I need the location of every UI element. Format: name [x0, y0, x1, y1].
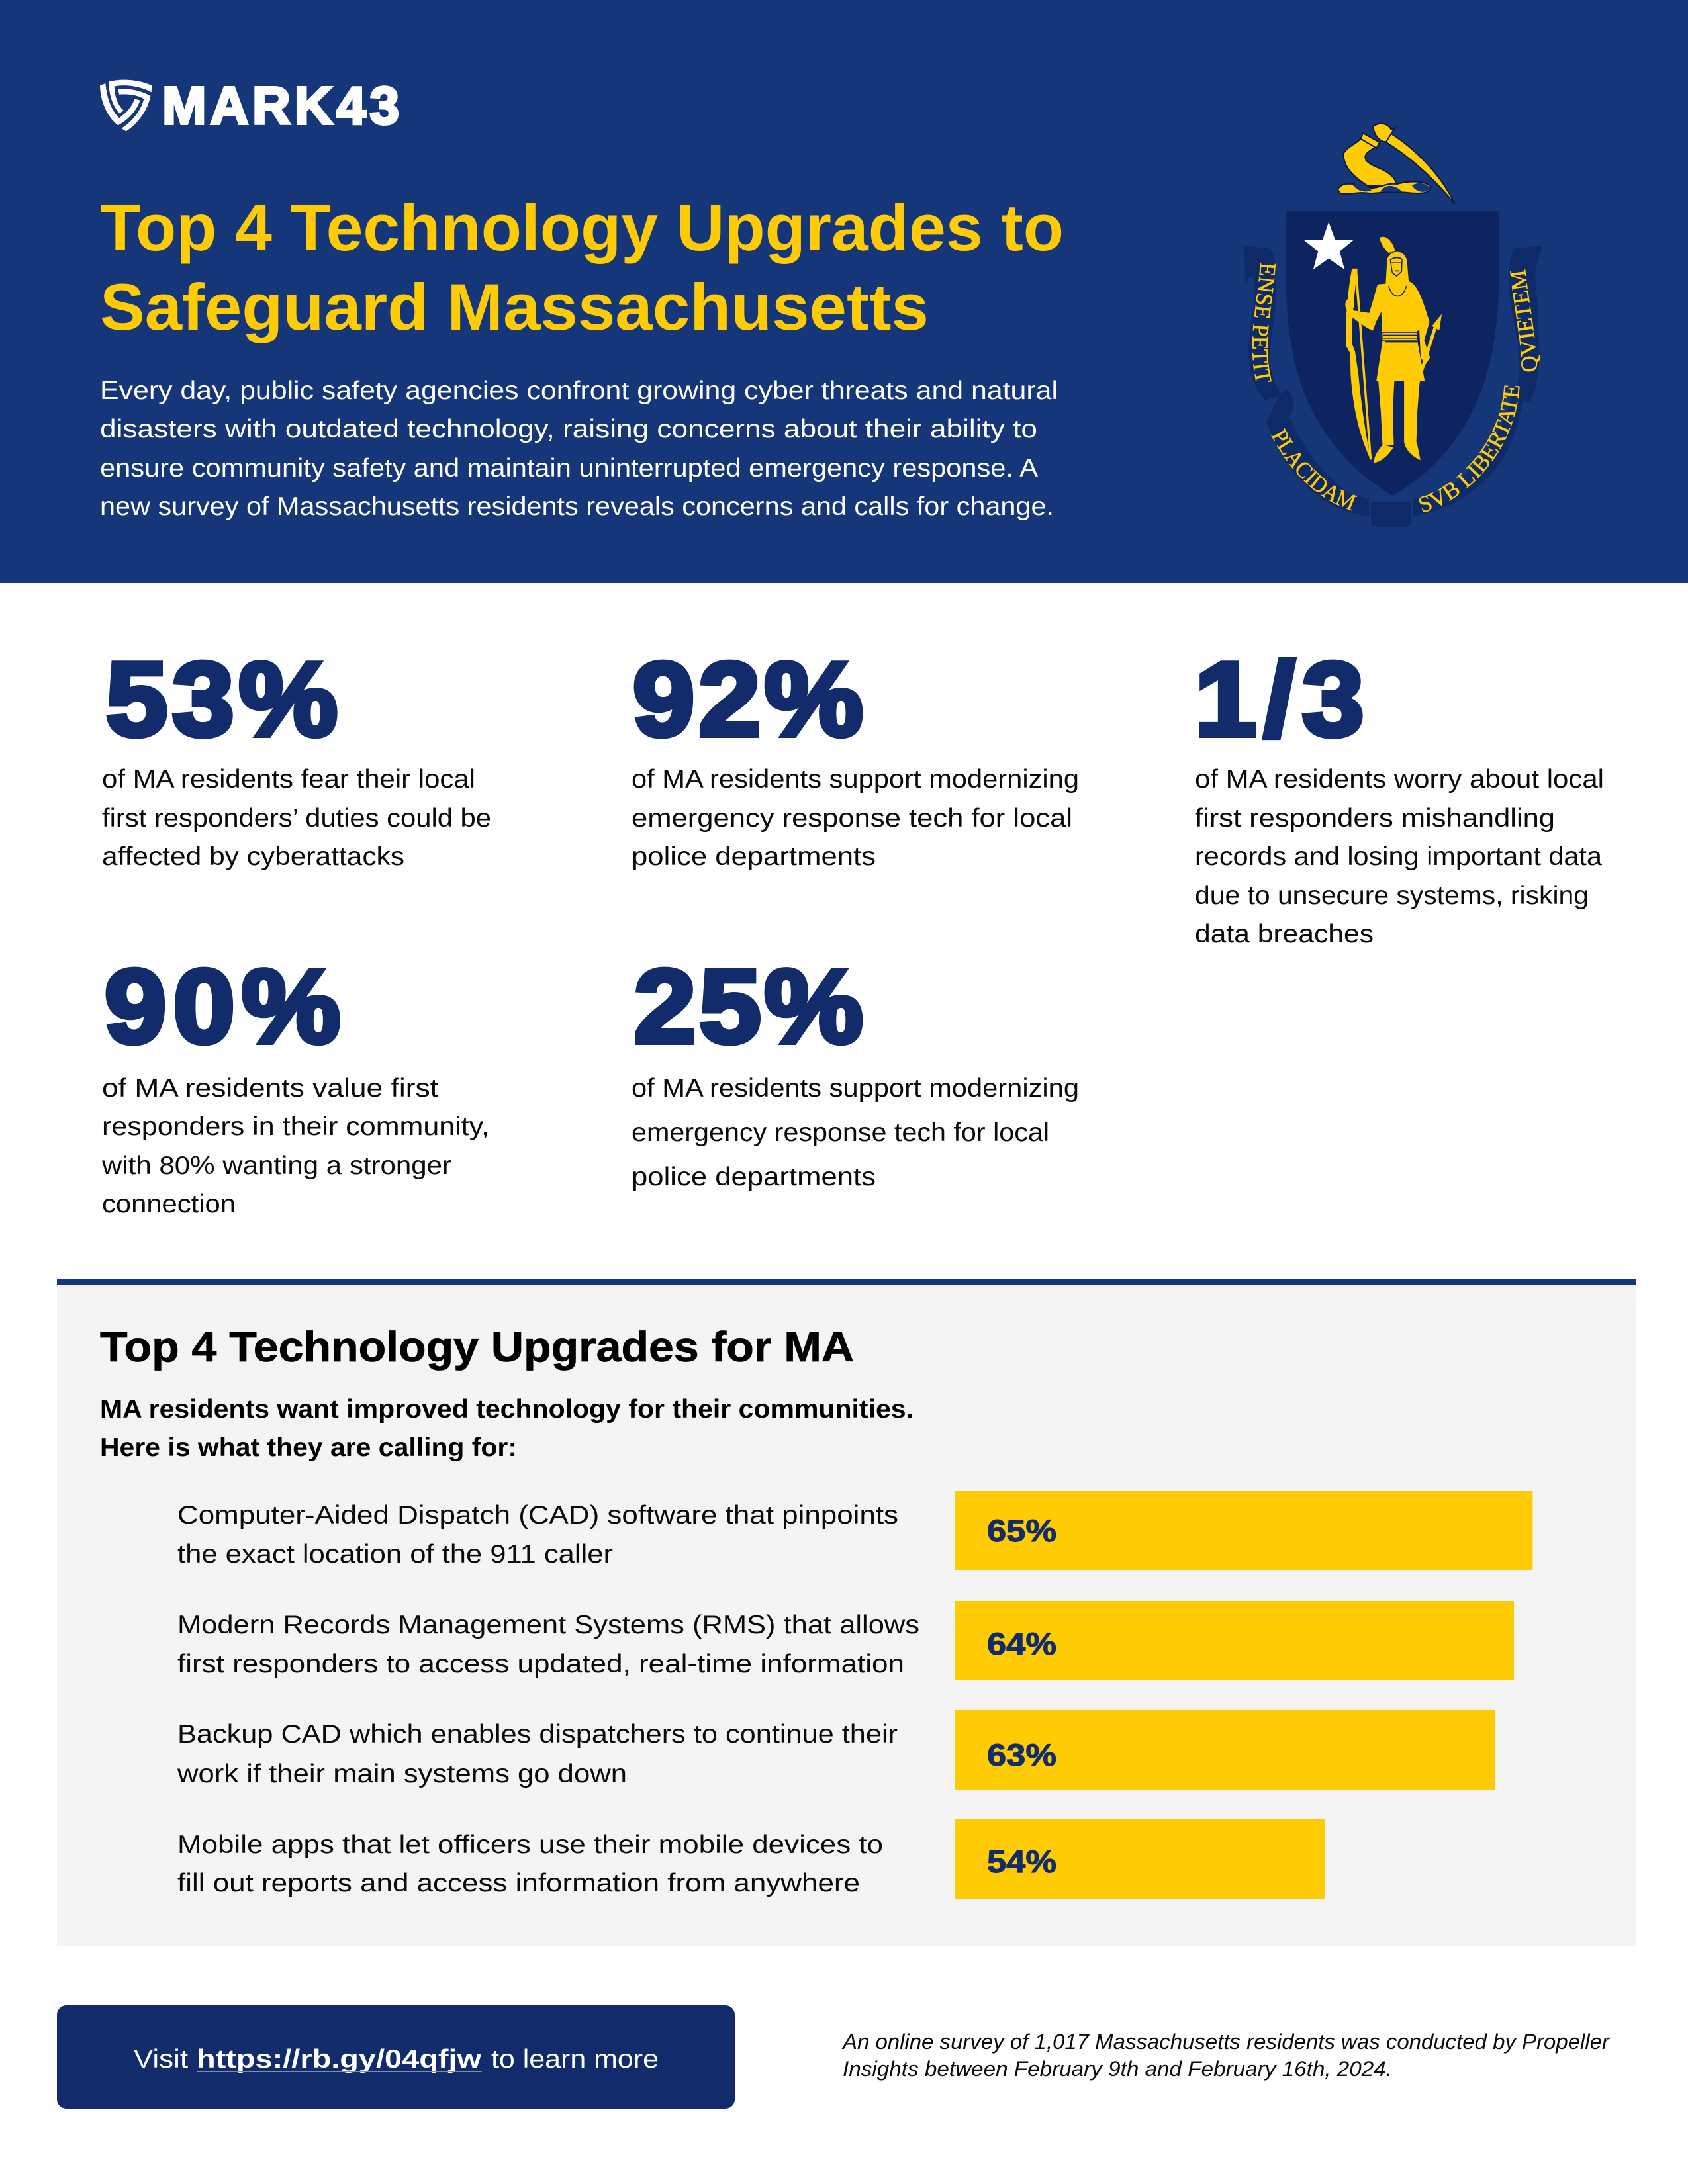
stat: 25%: police departments: [632, 1163, 876, 1191]
item: backup CAD: [177, 1720, 898, 1788]
stat: 90%: 90%: [105, 948, 340, 1065]
seal motto: PLACIDAM: [1271, 428, 1357, 511]
title: [100, 191, 1064, 343]
seal motto: SVB LIBERTATE: [1419, 385, 1520, 512]
seal motto: [1252, 262, 1540, 512]
footnote: Insights between February 9th and February 16th, 2024.: [843, 2057, 1392, 2081]
panel subheading: MA residents want improved technology for their communities.: [100, 1395, 914, 1424]
stat: 90%: of MA residents value first: [102, 1074, 438, 1103]
stat: 90%: responders in their community,: [102, 1113, 489, 1141]
stat: 92%: of MA residents support modernizing: [632, 765, 1079, 794]
stat: 53%: [102, 641, 491, 871]
seal ribbons: [1243, 246, 1542, 527]
stat: 1/3: [1195, 641, 1604, 948]
icon: star: [1303, 222, 1354, 269]
stat: 53%: 53%: [106, 641, 338, 758]
title: Top 4 Technology Upgrades to: [100, 191, 1064, 264]
figure details: [1383, 257, 1417, 341]
stat: 1/3: first responders mishandling: [1195, 804, 1555, 833]
panel heading: Top 4 Technology Upgrades for MA: [100, 1323, 854, 1371]
stat: 92%: police departments: [632, 842, 876, 871]
item: RMS: first responders to access updated, real-time information: [177, 1650, 904, 1678]
icon: Massachusetts seal: [1243, 123, 1542, 527]
panel subheading: [100, 1395, 914, 1462]
stat: 25%: of MA residents support modernizing: [632, 1074, 1079, 1103]
stat: 90%: with 80% wanting a stronger: [101, 1152, 451, 1180]
logo: Mark43: [100, 76, 399, 135]
stat: 92%: [632, 641, 1079, 871]
icon: shield: [100, 80, 152, 131]
bar: 64%: [955, 1601, 1514, 1680]
bar: 63%: [955, 1710, 1495, 1790]
button: learn more: https://rb.gy/04qfjw: [197, 2045, 482, 2073]
panel: top 4 upgrades: [57, 1279, 1636, 1946]
stat: 92%: emergency response tech for local: [632, 804, 1072, 833]
stat: 25%: 25%: [634, 948, 863, 1065]
figure: Native American with bow: [1345, 237, 1442, 463]
stat: 1/3: data breaches: [1195, 920, 1374, 948]
bar: 54%: 54%: [987, 1844, 1056, 1879]
bar: 64%: 64%: [987, 1626, 1056, 1661]
item: mobile apps: fill out reports and access information from anywhere: [177, 1869, 860, 1897]
bar: 63%: 63%: [987, 1737, 1056, 1772]
stat: 53%: first responders’ duties could be: [102, 804, 491, 833]
intro paragraph: ensure community safety and maintain uninterrupted emergency response. A: [100, 454, 1038, 482]
stat: 53%: affected by cyberattacks: [102, 842, 404, 871]
intro paragraph: disasters with outdated technology, raising concerns about their ability to: [100, 415, 1037, 443]
item: RMS: Modern Records Management Systems (RMS) that allows: [177, 1611, 919, 1639]
intro paragraph: Every day, public safety agencies confront growing cyber threats and natural: [100, 377, 1058, 405]
seal shield: [1286, 211, 1499, 495]
item: CAD software: [177, 1501, 898, 1569]
stat: 90%: connection: [102, 1190, 236, 1218]
item: RMS: [177, 1611, 919, 1678]
stat: 25%: emergency response tech for local: [632, 1118, 1049, 1147]
stat: 90%: [101, 948, 489, 1218]
stat: 1/3: of MA residents worry about local: [1195, 765, 1604, 794]
logo wordmark: MARK43: [162, 76, 399, 135]
button: learn more: [57, 2005, 735, 2109]
bar: 65%: [955, 1491, 1533, 1570]
item: CAD software: Computer-Aided Dispatch (CAD) software that pinpoints: [177, 1501, 898, 1529]
item: backup CAD: Backup CAD which enables dispatchers to continue their: [177, 1720, 898, 1749]
button: learn more: Visit: [134, 2045, 188, 2073]
stat: 25%: [632, 948, 1079, 1191]
stat: 53%: of MA residents fear their local: [102, 765, 475, 794]
item: mobile apps: [177, 1831, 883, 1897]
intro paragraph: [100, 377, 1058, 521]
item: mobile apps: Mobile apps that let officers use their mobile devices to: [177, 1831, 883, 1859]
footnote: [841, 2030, 1610, 2081]
stat: 1/3: due to unsecure systems, risking: [1195, 882, 1589, 910]
item: CAD software: the exact location of the 911 caller: [177, 1540, 613, 1569]
footnote: An online survey of 1,017 Massachusetts residents was conducted by Propeller: [841, 2030, 1610, 2054]
stat: 1/3: 1/3: [1195, 641, 1364, 758]
item: backup CAD: work if their main systems go down: [177, 1760, 627, 1788]
panel: header: [0, 0, 1688, 583]
bar: 65%: 65%: [987, 1513, 1056, 1548]
crest: arm and sword: [1338, 124, 1455, 204]
title: Safeguard Massachusetts: [100, 270, 929, 343]
stat: 92%: 92%: [633, 641, 863, 758]
seal motto: ENSE PETIT: [1252, 262, 1276, 383]
bar: 54%: [955, 1819, 1325, 1899]
button: learn more: to learn more: [491, 2045, 659, 2073]
stat: 1/3: records and losing important data: [1195, 842, 1602, 871]
intro paragraph: new survey of Massachusetts residents reveals concerns and calls for change.: [100, 492, 1054, 521]
seal motto: QVIETEM: [1510, 269, 1540, 372]
panel subheading: Here is what they are calling for:: [100, 1433, 517, 1462]
